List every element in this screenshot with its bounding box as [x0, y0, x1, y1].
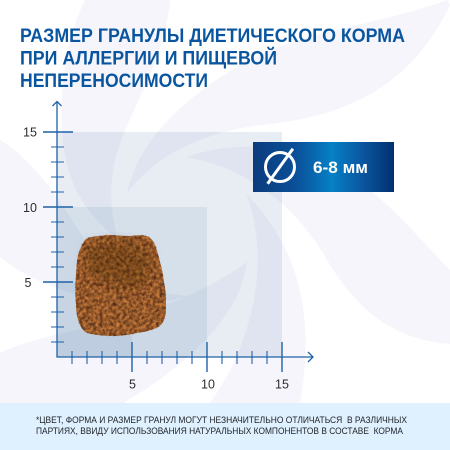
chart axes [43, 102, 313, 372]
x axis labels: 15 [275, 378, 289, 392]
title: ПРИ АЛЛЕРГИИ И ПИЩЕВОЙ [20, 48, 277, 70]
x axis labels: 10 [201, 378, 215, 392]
y axis labels: 5 [24, 276, 32, 290]
size square: 10 mm [57, 207, 207, 357]
size square: 15 mm [57, 132, 282, 357]
x axis major ticks [132, 342, 282, 372]
title: НЕПЕРЕНОСИМОСТИ [20, 71, 208, 92]
x axis with arrow [56, 352, 313, 362]
kibble granule [75, 235, 166, 336]
size square: 5 mm [57, 282, 132, 357]
y axis with arrow [52, 102, 62, 358]
footnote band [0, 403, 450, 450]
size banner [253, 142, 394, 192]
y axis labels: 10 [23, 201, 37, 215]
title: РАЗМЕР ГРАНУЛЫ ДИЕТИЧЕСКОГО КОРМА [20, 26, 405, 47]
footnote text [36, 415, 408, 437]
size value: 6-8 мм [313, 158, 368, 177]
y axis labels: 15 [23, 126, 37, 140]
x axis minor ticks [72, 351, 267, 364]
footnote text: ПАРТИЯХ, ВВИДУ ИСПОЛЬЗОВАНИЯ НАТУРАЛЬНЫХ КОМПОНЕНТОВ В СОСТАВЕ КОРМА [36, 426, 404, 437]
icon: diameter symbol [266, 150, 294, 182]
footnote text: *ЦВЕТ, ФОРМА И РАЗМЕР ГРАНУЛ МОГУТ НЕЗНАЧИТЕЛЬНО ОТЛИЧАТЬСЯ В РАЗЛИЧНЫХ [36, 415, 408, 426]
x axis labels [129, 378, 289, 392]
x axis labels: 5 [129, 378, 136, 392]
y axis labels [23, 126, 37, 290]
y axis major ticks [43, 132, 73, 282]
kibble shading [85, 242, 149, 290]
title [20, 26, 405, 92]
y axis minor ticks [51, 147, 64, 342]
